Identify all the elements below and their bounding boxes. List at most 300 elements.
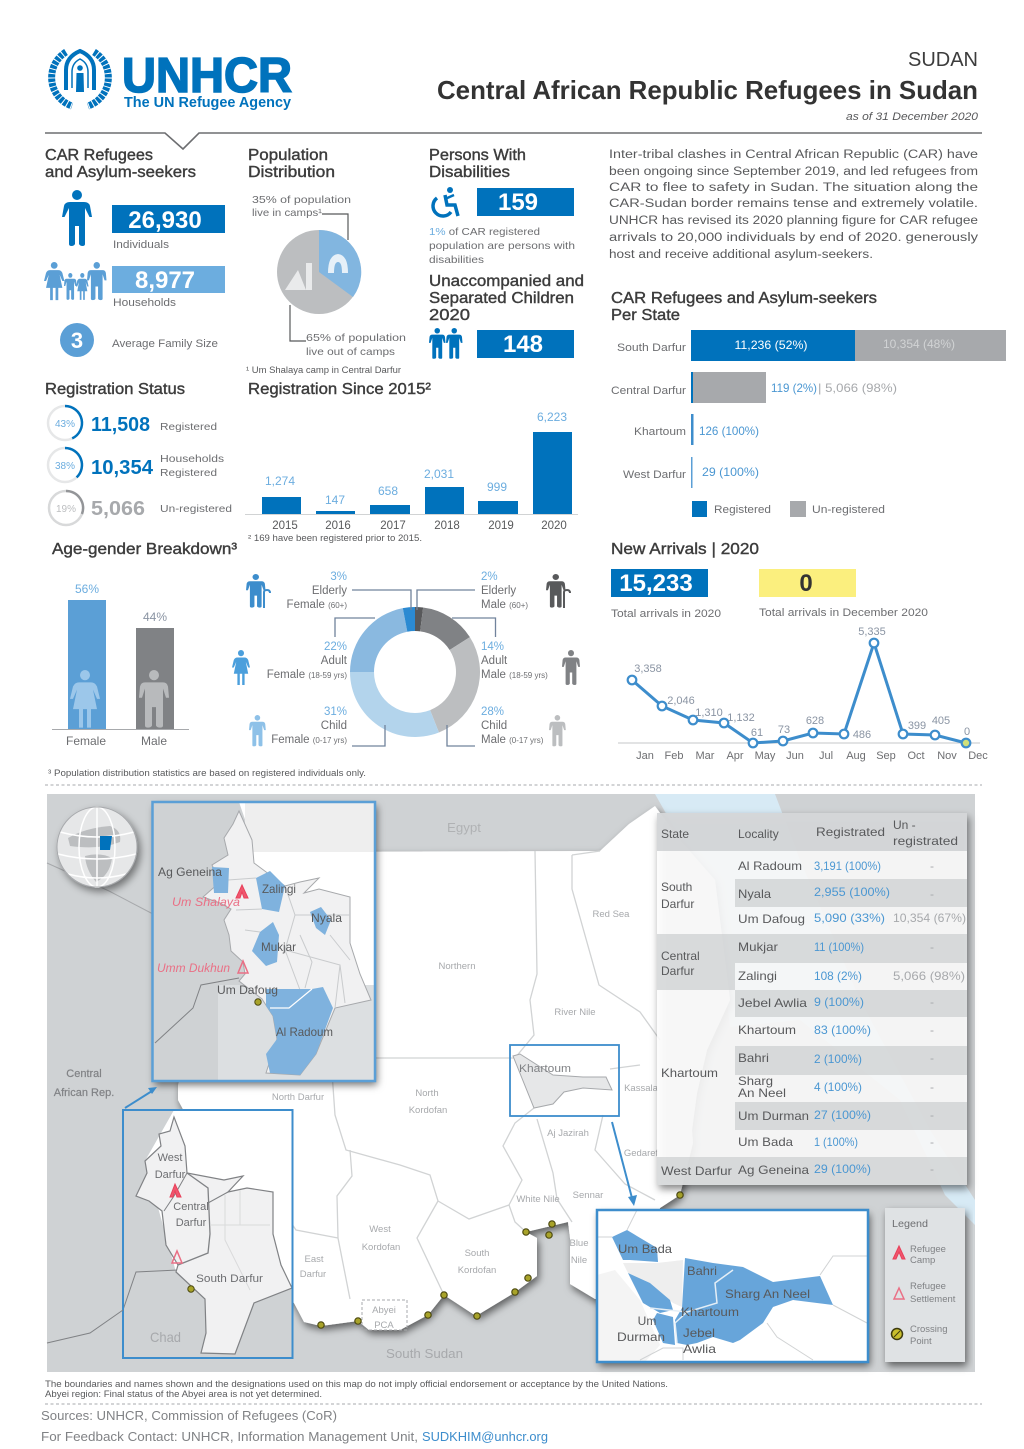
Darfur outline xyxy=(203,811,371,1075)
locality labels: Sharg An Neel xyxy=(725,1287,810,1301)
bar values: | 5,066 (98%) xyxy=(818,381,897,395)
crossing marker xyxy=(188,1286,194,1292)
table localities xyxy=(738,859,809,1177)
intro paragraph: host and receive additional asylum-seekers. xyxy=(609,249,873,261)
panel: refugees per state xyxy=(611,290,1006,517)
donut leader lines xyxy=(335,590,496,746)
bar years: 2016 xyxy=(325,520,351,532)
total arrivals labels xyxy=(611,607,928,620)
region and state labels: South Sudan xyxy=(386,1346,463,1361)
locality labels: Um Bada xyxy=(618,1242,672,1256)
region and state labels: Abyei xyxy=(372,1305,396,1316)
table localities: Al Radoum xyxy=(738,859,802,873)
legend: Un-registered xyxy=(812,504,885,516)
UNHCR logo xyxy=(52,49,292,111)
heading: Per State xyxy=(611,307,680,324)
in camps label: 35% of population xyxy=(252,194,351,206)
chart values: 1,310 xyxy=(695,707,723,719)
state labels: West Darfur xyxy=(623,469,686,481)
table localities: An Neel xyxy=(738,1086,786,1100)
table localities: Ag Geneina xyxy=(738,1163,809,1177)
region and state labels: North xyxy=(415,1088,439,1099)
region and state labels: Darfur xyxy=(300,1269,326,1280)
label: adult female: Adult xyxy=(321,655,348,667)
chart months: Jul xyxy=(819,750,833,762)
table states: South xyxy=(661,880,692,894)
value xyxy=(477,330,574,358)
state boundaries xyxy=(273,851,660,1299)
gender values and labels: 56% xyxy=(75,582,99,596)
heading: Separated Children xyxy=(429,290,574,307)
locality labels: Jebel xyxy=(683,1326,715,1340)
chart values: 5,335 xyxy=(858,626,886,638)
chart months: Nov xyxy=(937,750,957,762)
label: child female: 31% xyxy=(324,706,347,718)
average family size badge xyxy=(60,323,94,357)
map disclaimer: The boundaries and names shown and the designations used on this map do not imply official endorsement or acceptance by the United Nations. xyxy=(45,1379,668,1389)
bar years: 2015 xyxy=(272,520,298,532)
bar years xyxy=(272,520,567,532)
region and state labels: Gedaref xyxy=(624,1148,659,1159)
locality labels: Um Dafoug xyxy=(217,983,278,997)
intro paragraph: CAR to flee to safety in Sudan. The situation along the xyxy=(609,182,978,194)
chart months: Feb xyxy=(665,750,683,762)
locality labels: Awlia xyxy=(683,1342,716,1356)
Sudan territory xyxy=(178,806,730,1330)
icon: elderly male xyxy=(546,574,570,608)
region and state labels: Kordofan xyxy=(409,1105,447,1116)
locality labels: Ag Geneina xyxy=(158,865,222,879)
heading: Persons With xyxy=(429,147,526,164)
table header: Un - xyxy=(893,818,916,832)
bar years: 2019 xyxy=(488,520,514,532)
age donut chart xyxy=(350,607,480,737)
bar values: 10,354 (48%) xyxy=(883,337,955,351)
locality labels: Al Radoum xyxy=(276,1025,333,1039)
chart months: Aug xyxy=(846,750,866,762)
ring: registered xyxy=(48,406,82,440)
average family size label: Average Family Size xyxy=(112,338,218,350)
table un-registered values: - xyxy=(930,859,934,873)
table header xyxy=(661,818,958,848)
label: refugee camp: Camp xyxy=(910,1255,935,1266)
feedback contact: SUDKHIM@unhcr.org xyxy=(422,1429,548,1444)
icon: adult male xyxy=(562,650,580,685)
region and state labels: Aj Jazirah xyxy=(547,1128,589,1139)
Abyei box xyxy=(362,1300,407,1330)
gender values and labels: 44% xyxy=(143,610,167,624)
table header: State xyxy=(661,827,689,841)
region and state labels: Blue xyxy=(569,1238,589,1249)
label: child female: Child xyxy=(321,720,347,732)
bar values: 126 (100%) xyxy=(699,424,759,438)
region and state labels: Sennar xyxy=(573,1190,603,1201)
table localities: Khartoum xyxy=(738,1023,796,1037)
table localities: Um Bada xyxy=(738,1135,793,1149)
table un-registered values: - xyxy=(930,1108,934,1122)
label: adult male: Adult xyxy=(481,655,508,667)
panel: unaccompanied and separated children xyxy=(429,273,584,359)
average family size badge: 3 xyxy=(71,328,83,353)
bar values: 147 xyxy=(325,493,345,507)
camp marker xyxy=(236,885,248,898)
table localities: Sharg xyxy=(738,1074,773,1088)
table un-registered values xyxy=(893,859,966,1176)
chart values xyxy=(634,626,970,741)
table registered values: 27 (100%) xyxy=(814,1108,871,1122)
river lines xyxy=(650,1270,733,1343)
table un-registered values: - xyxy=(930,1023,934,1037)
legend xyxy=(692,501,885,517)
pie chart xyxy=(277,230,361,314)
region and state labels: White Nile xyxy=(516,1194,560,1205)
region and state labels: South xyxy=(465,1248,489,1259)
table registered values: 9 (100%) xyxy=(814,995,864,1009)
value: registered: 11,508 xyxy=(91,414,150,436)
Darfur outline xyxy=(136,1117,292,1354)
icon: town xyxy=(285,263,312,290)
label: adult male: Male (18-59 yrs) xyxy=(481,669,548,681)
label: child male: Child xyxy=(481,720,507,732)
out of camps label: 65% of population xyxy=(306,332,406,344)
chart months: Oct xyxy=(907,750,925,762)
ring: un-registered xyxy=(49,491,83,525)
locality labels xyxy=(157,865,342,1039)
stacked bars xyxy=(691,330,1006,488)
chart months: Mar xyxy=(696,750,715,762)
table registered values: 4 (100%) xyxy=(814,1080,862,1094)
settlement marker xyxy=(172,1251,182,1263)
bar values xyxy=(699,337,955,479)
table header: Registrated xyxy=(816,825,885,839)
heading: New Arrivals | 2020 xyxy=(611,541,759,558)
inset: Darfur states xyxy=(123,1110,292,1358)
gender bar chart xyxy=(52,582,189,748)
value: 148 xyxy=(503,331,543,358)
state labels xyxy=(611,342,686,481)
camp marker xyxy=(170,1184,181,1197)
heading: Registration Status xyxy=(45,381,185,398)
chart values: 628 xyxy=(806,715,824,727)
label: elderly female: 3% xyxy=(330,571,347,583)
table registered values: 83 (100%) xyxy=(814,1023,871,1037)
table states: Darfur xyxy=(661,897,694,911)
label: elderly female: Female (60+) xyxy=(287,599,347,611)
crossing marker xyxy=(255,999,261,1005)
intro paragraph: arrivals to 20,000 individuals by end of 2020. generously xyxy=(609,232,978,244)
bar values: 6,223 xyxy=(537,410,567,424)
panel: registration status xyxy=(45,381,232,525)
heading: CAR Refugees and Asylum-seekers xyxy=(611,290,877,307)
table un-registered values: - xyxy=(930,1135,934,1149)
table states: Central xyxy=(661,949,700,963)
total arrivals labels: Total arrivals in 2020 xyxy=(611,608,721,620)
region and state labels: Nile xyxy=(571,1255,587,1266)
households label: Households xyxy=(113,297,177,309)
gender values and labels xyxy=(66,582,167,748)
intro paragraph: been ongoing since September 2019, and led refugees from xyxy=(609,166,978,178)
locality labels: Nyala xyxy=(311,911,342,925)
connector lines from globe xyxy=(47,863,153,914)
value: un-registered: 5,066 xyxy=(91,498,145,520)
intro paragraph: Inter-tribal clashes in Central African Republic (CAR) have xyxy=(609,149,978,161)
logo wordmark: UNHCR xyxy=(122,49,292,103)
table registered values: 29 (100%) xyxy=(814,1162,871,1176)
individuals label: Individuals xyxy=(113,239,170,251)
total arrivals value: 15,233 xyxy=(619,570,693,597)
heading: Population xyxy=(248,147,328,164)
panel: new arrivals xyxy=(611,541,988,762)
state labels: Chad xyxy=(150,1329,181,1345)
state labels xyxy=(150,1152,263,1345)
footnote 1: ¹ Um Shalaya camp in Central Darfur xyxy=(246,365,401,375)
label: child female: Female (0-17 yrs) xyxy=(271,734,347,746)
bar years: 2017 xyxy=(380,520,406,532)
state labels: West xyxy=(158,1152,182,1164)
bar values xyxy=(265,410,567,507)
table registered values: 5,090 (33%) xyxy=(814,911,885,925)
state labels: Darfur xyxy=(155,1169,186,1181)
state labels: Central Darfur xyxy=(611,385,686,397)
table header: registrated xyxy=(893,834,958,848)
bar values: 119 (2%) xyxy=(771,381,817,395)
bar values: 999 xyxy=(487,480,507,494)
locality labels: Mukjar xyxy=(261,940,296,954)
icon: person xyxy=(62,190,92,246)
table un-registered values: - xyxy=(930,1051,934,1065)
highlighted localities xyxy=(612,1230,833,1345)
line chart xyxy=(618,626,988,762)
table localities: Bahri xyxy=(738,1051,769,1065)
table registered values: 2 (100%) xyxy=(814,1052,862,1066)
state labels: Darfur xyxy=(176,1217,207,1229)
legend title: Legend xyxy=(892,1219,928,1230)
icon: family xyxy=(44,262,106,300)
in camps label: live in camps¹ xyxy=(252,207,323,219)
sea xyxy=(655,794,975,1225)
table localities: Jebel Awlia xyxy=(738,996,807,1010)
table un-registered values: - xyxy=(930,995,934,1009)
december arrivals value: 0 xyxy=(799,570,813,597)
icon: female xyxy=(70,670,100,728)
region and state labels: African Rep. xyxy=(54,1087,114,1099)
region and state labels: North Darfur xyxy=(272,1092,324,1103)
panel: population distribution xyxy=(246,147,406,375)
chart months: Jan xyxy=(636,750,654,762)
table localities: Mukjar xyxy=(738,940,778,954)
region and state labels: PCA xyxy=(374,1320,394,1331)
heading: and Asylum-seekers xyxy=(45,164,196,181)
label: registered: Registered xyxy=(160,421,217,433)
bar chart xyxy=(245,410,578,532)
table un-registered values: 5,066 (98%) xyxy=(893,969,965,983)
chart months: Apr xyxy=(726,750,744,762)
region and state labels: River Nile xyxy=(554,1007,596,1018)
icon: crossing point xyxy=(892,1328,902,1340)
chart months: May xyxy=(755,750,776,762)
locality labels: Um xyxy=(638,1314,656,1328)
region and state labels: Kordofan xyxy=(458,1265,496,1276)
panel: map xyxy=(47,794,975,1372)
table un-registered values: - xyxy=(930,1162,934,1176)
ring: households registered: 38% xyxy=(55,461,75,472)
description: disabilities xyxy=(429,254,484,266)
table localities: Um Dafoug xyxy=(738,912,805,926)
ring: households registered xyxy=(48,448,82,482)
label: elderly male: Male (60+) xyxy=(481,599,528,611)
bar values: 658 xyxy=(378,484,398,498)
legend: Registered xyxy=(714,504,771,516)
description: population are persons with xyxy=(429,240,575,252)
label: elderly male: 2% xyxy=(481,571,498,583)
region and state labels xyxy=(54,820,659,1361)
value xyxy=(477,188,574,216)
icon: children xyxy=(429,328,462,359)
chart values: 3,358 xyxy=(634,663,662,675)
logo tagline: The UN Refugee Agency xyxy=(124,95,291,111)
locality labels: Bahri xyxy=(687,1264,717,1278)
december arrivals value xyxy=(759,569,856,597)
table registered values: 1 (100%) xyxy=(814,1135,858,1149)
icon: refugee settlement xyxy=(894,1288,904,1299)
map disclaimer: Abyei region: Final status of the Abyei area is not yet determined. xyxy=(45,1389,322,1399)
locality table xyxy=(657,813,967,1185)
table states: Khartoum xyxy=(661,1066,718,1080)
label: child male: Male (0-17 yrs) xyxy=(481,734,543,746)
locality labels xyxy=(617,1242,810,1356)
ring: un-registered: 19% xyxy=(56,504,76,515)
label: households registered: Households xyxy=(160,453,224,465)
bar values: 29 (100%) xyxy=(702,465,759,479)
chart months: Dec xyxy=(968,750,988,762)
sources: Sources: UNHCR, Commission of Refugees (CoR) xyxy=(41,1408,337,1423)
label: refugee camp: Refugee xyxy=(910,1244,946,1255)
region and state labels: Kordofan xyxy=(362,1242,400,1253)
heading: Age-gender Breakdown³ xyxy=(52,541,238,558)
state labels: Khartoum xyxy=(634,426,686,438)
highlighted localities xyxy=(212,867,333,1075)
individuals value: 26,930 xyxy=(128,207,202,234)
locality boundaries xyxy=(228,878,350,1008)
description: 1% of CAR registered xyxy=(429,226,532,238)
label: un-registered: Un-registered xyxy=(160,503,232,515)
table un-registered values: - xyxy=(930,887,934,901)
table registered values: 3,191 (100%) xyxy=(814,859,881,873)
region and state labels: Kassala xyxy=(624,1083,659,1094)
table header: Locality xyxy=(738,827,779,841)
label: adult female: 22% xyxy=(324,641,347,653)
inset: Darfur localities xyxy=(152,802,375,1081)
table states: West Darfur xyxy=(661,1164,732,1178)
icon: elderly female xyxy=(246,574,270,608)
table states xyxy=(661,880,732,1178)
state labels: South Darfur xyxy=(196,1273,263,1285)
panel: persons with disabilities xyxy=(429,147,575,266)
chart values: 73 xyxy=(778,724,790,736)
table registered values: 2,955 (100%) xyxy=(814,885,890,899)
chart values: 61 xyxy=(751,727,763,739)
chart months: Jun xyxy=(786,750,804,762)
arrow: inset 2 to inset 1 xyxy=(125,1087,157,1108)
value: 159 xyxy=(498,189,538,216)
country: SUDAN xyxy=(908,49,978,71)
icon: wheelchair xyxy=(433,187,458,216)
icon: tent xyxy=(328,254,348,273)
intro paragraph: CAR-Sudan border remains tense and extremely volatile. xyxy=(609,198,978,210)
table registered values: 108 (2%) xyxy=(814,969,862,983)
locality labels: Khartoum xyxy=(681,1305,739,1319)
label: refugee settlement: Refugee xyxy=(910,1281,946,1292)
label: refugee settlement: Settlement xyxy=(910,1294,956,1305)
locator: Khartoum xyxy=(510,1045,619,1116)
date: as of 31 December 2020 xyxy=(846,111,979,123)
arrow: Khartoum to inset xyxy=(612,1122,637,1206)
region and state labels: East xyxy=(304,1254,324,1265)
region and state labels: Egypt xyxy=(447,820,481,835)
header rule with notch xyxy=(45,133,982,149)
table localities: Zalingi xyxy=(738,969,777,983)
table registered values: 11 (100%) xyxy=(814,940,864,954)
icon: child female xyxy=(249,715,266,746)
header titles xyxy=(437,49,979,123)
heading: Distribution xyxy=(248,164,335,181)
value: households registered: 10,354 xyxy=(91,457,154,479)
icon: adult female xyxy=(232,650,250,685)
region and state labels: Red Sea xyxy=(593,909,630,920)
label: elderly male: Elderly xyxy=(481,585,516,597)
state labels: South Darfur xyxy=(617,342,686,354)
heading: Unaccompanied and xyxy=(429,273,584,290)
icon: child male xyxy=(549,715,566,746)
chart months: Sep xyxy=(876,750,896,762)
locality labels: Zalingi xyxy=(262,882,296,896)
chart months xyxy=(636,750,988,762)
panel: age-gender breakdown xyxy=(52,541,580,748)
region and state labels: Northern xyxy=(439,961,475,972)
panel: CAR refugees and asylum-seekers xyxy=(44,147,225,357)
label: elderly female: Elderly xyxy=(312,585,347,597)
chart values: 405 xyxy=(932,715,950,727)
icon: male xyxy=(139,670,169,728)
region and state labels: West xyxy=(369,1224,391,1235)
bar values: 1,274 xyxy=(265,474,295,488)
gender values and labels: Female xyxy=(66,734,106,748)
region and state labels: Central xyxy=(66,1068,102,1080)
crossing points xyxy=(318,1192,683,1328)
state borders xyxy=(164,1173,270,1290)
individuals value xyxy=(112,205,225,234)
table localities: Nyala xyxy=(738,887,771,901)
label: child male: 28% xyxy=(481,706,504,718)
chart values: 2,046 xyxy=(667,695,695,707)
bar values: 2,031 xyxy=(424,467,454,481)
heading: 2020 xyxy=(429,307,470,324)
icon: refugee camp xyxy=(893,1246,905,1259)
heading: Registration Since 2015² xyxy=(248,381,432,398)
bar years: 2018 xyxy=(434,520,460,532)
label: households registered: Registered xyxy=(160,467,217,479)
bar years: 2020 xyxy=(541,520,567,532)
table un-registered values: - xyxy=(930,940,934,954)
footnote 3: ³ Population distribution statistics are based on registered individuals only. xyxy=(48,768,366,778)
table un-registered values: - xyxy=(930,1080,934,1094)
out of camps label: live out of camps xyxy=(306,346,395,358)
Chad and CAR border outside inset xyxy=(47,1310,123,1343)
locality labels: Durman xyxy=(617,1330,665,1344)
chart values: 399 xyxy=(908,720,926,732)
gender values and labels: Male xyxy=(141,734,167,748)
globe xyxy=(57,807,137,887)
